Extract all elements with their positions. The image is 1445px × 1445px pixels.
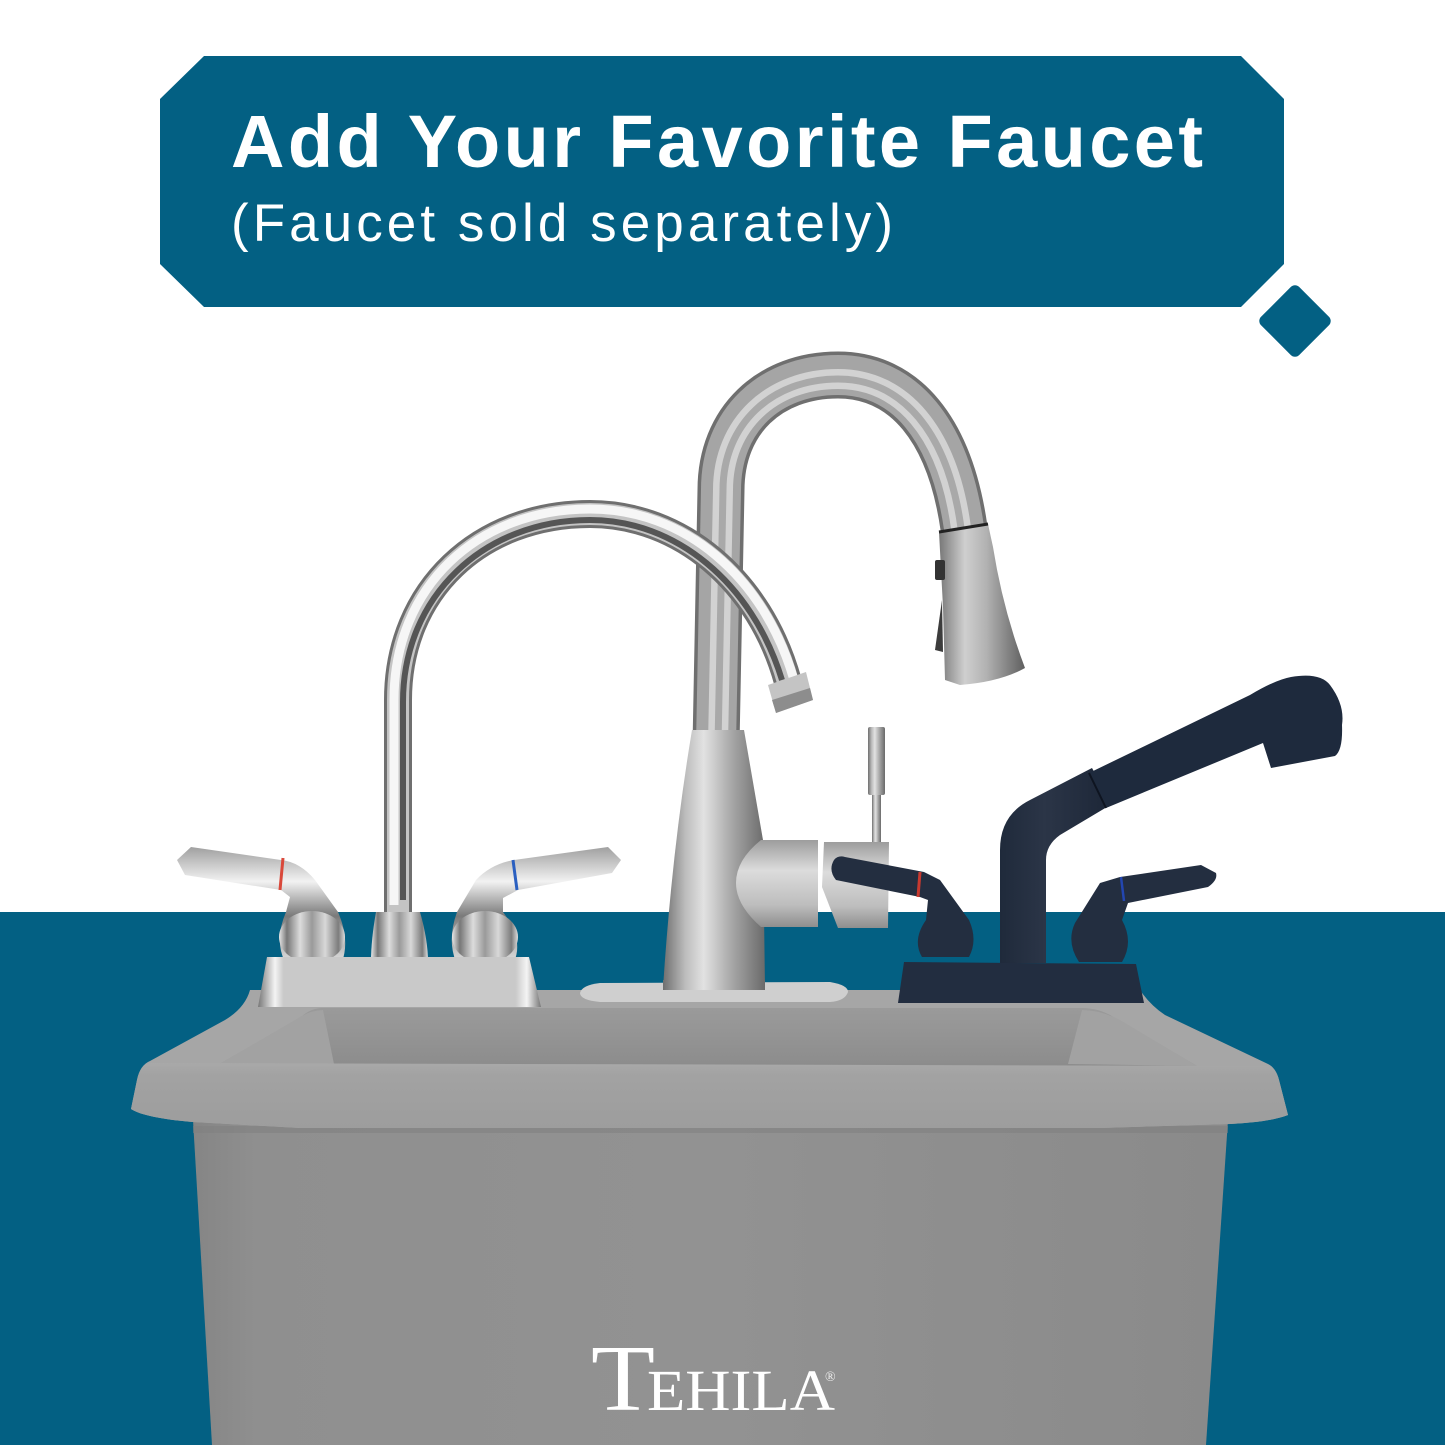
base bbox=[898, 962, 1144, 1003]
sink rim bbox=[131, 990, 1288, 1128]
speech bubble diamond bbox=[1257, 283, 1333, 359]
brushed steel pull-down faucet bbox=[580, 375, 1025, 1002]
blue ring bbox=[1121, 877, 1124, 901]
subheading: (Faucet sold separately) bbox=[231, 194, 893, 253]
right handle bbox=[1071, 865, 1216, 962]
teal background band bbox=[0, 912, 1445, 1445]
left handle bbox=[177, 847, 345, 962]
valve body bbox=[736, 840, 818, 927]
sink front rim bbox=[131, 1063, 1288, 1128]
gooseneck bbox=[716, 375, 964, 745]
spray head bbox=[939, 524, 1025, 685]
left handle bbox=[831, 856, 974, 957]
brand logo bbox=[591, 1327, 836, 1431]
heading banner bbox=[160, 56, 1284, 307]
blue ring bbox=[513, 860, 517, 890]
right handle bbox=[452, 847, 621, 962]
heading: Add Your Favorite Faucet bbox=[231, 100, 1203, 183]
sink bbox=[131, 990, 1288, 1445]
brand logo: T bbox=[591, 1327, 655, 1431]
gooseneck spout bbox=[398, 514, 788, 915]
pull-out wand bbox=[1089, 676, 1342, 808]
chrome two-handle faucet bbox=[177, 509, 813, 1007]
brand logo: EHILA bbox=[647, 1358, 835, 1423]
lever handle bbox=[868, 727, 885, 795]
center knob bbox=[371, 912, 428, 962]
sink body bbox=[193, 1120, 1228, 1445]
sink basin bbox=[216, 1008, 1197, 1066]
red ring bbox=[918, 872, 920, 897]
matte black faucet bbox=[831, 676, 1342, 1003]
deck plate bbox=[580, 982, 848, 1002]
faucet base cone bbox=[663, 730, 765, 988]
mounting plate bbox=[258, 957, 541, 1007]
brand logo: ® bbox=[825, 1370, 836, 1385]
aerator bbox=[768, 672, 813, 713]
red ring bbox=[280, 858, 283, 890]
spout bbox=[1000, 768, 1112, 963]
